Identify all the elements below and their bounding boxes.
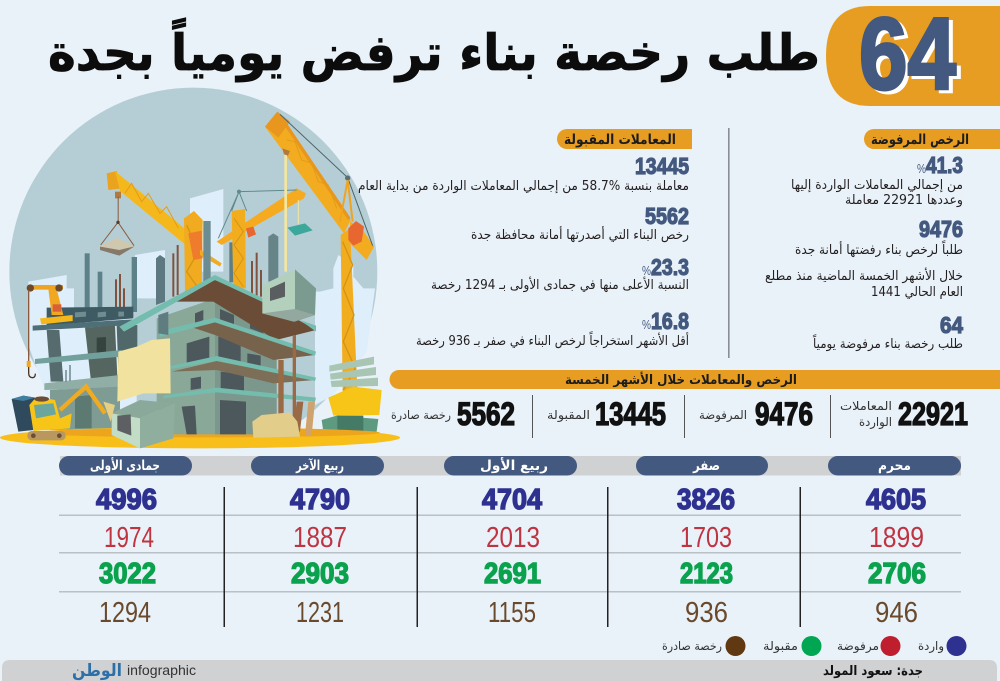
heading pill <box>864 129 1000 149</box>
excavator and bin <box>12 387 115 440</box>
right tower crane <box>265 112 382 432</box>
background buildings <box>28 189 375 418</box>
panel: five month totals <box>390 370 1000 438</box>
front concrete block <box>112 400 175 448</box>
row: accepted: 2903 <box>291 558 349 590</box>
legend: issued: رخصة صادرة <box>662 639 722 654</box>
legend: rejected: مرفوضة <box>837 639 879 654</box>
text: معاملة بنسبة %58.7 من إجمالي المعاملات الواردة من بداية العام <box>358 179 689 194</box>
heading: المعاملات المقبولة <box>564 132 676 148</box>
row: issued <box>99 597 918 629</box>
row: incoming: 4605 <box>866 484 926 516</box>
row: issued: 1294 <box>99 597 151 629</box>
infographic label: infographic <box>127 662 196 678</box>
stat: 41.3%: 41.3 <box>926 152 963 178</box>
month header: Safar <box>636 456 768 476</box>
text: خلال الأشهر الخمسة الماضية منذ مطلع <box>765 267 963 284</box>
label: الواردة <box>859 415 892 430</box>
monthly table <box>59 456 961 629</box>
stat: 23.3%: 23.3 <box>651 254 689 280</box>
text: العام الحالي 1441 <box>871 285 963 300</box>
month header: Jumada I <box>59 456 192 476</box>
row: rejected: 1703 <box>680 522 732 554</box>
row: rejected <box>104 522 924 554</box>
month header: Rabi II <box>251 456 384 476</box>
row: accepted: 2706 <box>868 558 926 590</box>
text: رخص البناء التي أصدرتها أمانة محافظة جدة <box>471 226 689 243</box>
number 64: 64 <box>859 0 956 111</box>
panel: rejected licences <box>765 129 1000 352</box>
teal floor slabs <box>119 275 316 402</box>
heading pill <box>557 129 692 149</box>
cover below ground <box>0 439 400 459</box>
row: rejected: 1887 <box>293 522 347 554</box>
band <box>390 370 1000 389</box>
text: طلباً لرخص بناء رفضتها أمانة جدة <box>795 240 963 258</box>
stat: 16.8%: 16.8 <box>651 308 689 334</box>
legend: incoming: واردة <box>918 639 944 654</box>
illustration: construction site in a circle <box>0 88 400 459</box>
legend <box>662 636 966 656</box>
hanging concrete block <box>262 269 316 322</box>
row: rejected: 1974 <box>104 522 154 554</box>
number shadow: 64 <box>863 0 960 114</box>
legend: accepted: مقبولة <box>763 639 798 654</box>
row: accepted: 2123 <box>680 558 733 590</box>
month header: Rabi I <box>444 456 577 476</box>
month header: Muharram <box>828 456 961 476</box>
credit: جدة: سعود المولد <box>823 664 923 679</box>
stat: 9476: 9476 <box>919 216 963 242</box>
row: rejected: 2013 <box>486 522 540 554</box>
total incoming: 22921 <box>898 396 968 432</box>
percent sign: % <box>917 161 926 176</box>
title: طلب رخصة بناء ترفض يومياً بجدة <box>48 17 820 83</box>
row: accepted: 3022 <box>99 558 156 590</box>
month header: Muharram: محرم <box>878 458 911 474</box>
brown slab undersides <box>167 280 316 340</box>
label: المعاملات <box>840 399 892 413</box>
legend: accepted <box>763 636 822 656</box>
legend: incoming <box>918 636 966 656</box>
row: incoming: 3826 <box>677 484 735 516</box>
sky circle <box>9 88 377 456</box>
central building <box>119 275 316 435</box>
row: incoming: 4790 <box>290 484 350 516</box>
band heading: الرخص والمعاملات خلال الأشهر الخمسة <box>565 371 797 388</box>
stacked sand bricks <box>252 412 300 438</box>
label: المقبولة <box>547 408 590 423</box>
total rejected: 9476 <box>755 396 813 432</box>
text: من إجمالي المعاملات الواردة إليها <box>791 178 963 193</box>
row: rejected: 1899 <box>869 522 924 554</box>
panel: accepted transactions <box>358 129 692 349</box>
row: issued: 1155 <box>488 597 536 629</box>
text: طلب رخصة بناء مرفوضة يومياً <box>813 334 963 352</box>
footer bar <box>2 660 997 681</box>
hanging cloth <box>117 338 171 402</box>
label: المرفوضة <box>699 408 747 423</box>
row: incoming <box>96 484 926 516</box>
stat: 5562: 5562 <box>645 203 689 229</box>
row: incoming: 4996 <box>96 484 157 516</box>
row: issued: 936 <box>685 597 728 629</box>
month header: Rabi II: ربيع الآخر <box>295 458 344 474</box>
brown columns <box>278 335 315 435</box>
text: وعددها 22921 معاملة <box>845 193 963 208</box>
ground <box>0 427 400 448</box>
legend: rejected <box>837 636 900 656</box>
title badge: orange tab with 64 <box>826 0 1000 114</box>
text: النسبة الأعلى منها في جمادى الأولى بـ 1294 رخصة <box>431 276 689 293</box>
total issued: 5562 <box>457 396 515 432</box>
row: issued: 1231 <box>296 597 344 629</box>
row: issued: 946 <box>875 597 918 629</box>
left unfinished building <box>33 253 165 430</box>
row: accepted: 2691 <box>484 558 541 590</box>
row: accepted <box>99 558 926 590</box>
row: incoming: 4704 <box>482 484 542 516</box>
logo: Al Watan: الوطن <box>72 661 122 681</box>
heading: الرخص المرفوضة <box>871 132 969 148</box>
legend: issued <box>662 636 746 656</box>
month header: Rabi I: ربيع الأول <box>480 457 548 474</box>
stat: 13445: 13445 <box>635 153 689 179</box>
total accepted: 13445 <box>595 396 666 432</box>
month header: Jumada I: جمادى الأولى <box>90 457 160 474</box>
month header: Safar: صفر <box>692 458 720 474</box>
small yellow hoist crane <box>27 284 73 378</box>
stat: 64: 64 <box>940 312 963 338</box>
left tower crane <box>100 171 222 292</box>
text: أقل الأشهر استخراجاً لرخص البناء في صفر بـ 936 رخصة <box>416 331 689 349</box>
label: رخصة صادرة <box>391 408 451 423</box>
percent sign: % <box>642 317 651 332</box>
percent sign: % <box>642 263 651 278</box>
middle tower crane <box>172 188 313 297</box>
